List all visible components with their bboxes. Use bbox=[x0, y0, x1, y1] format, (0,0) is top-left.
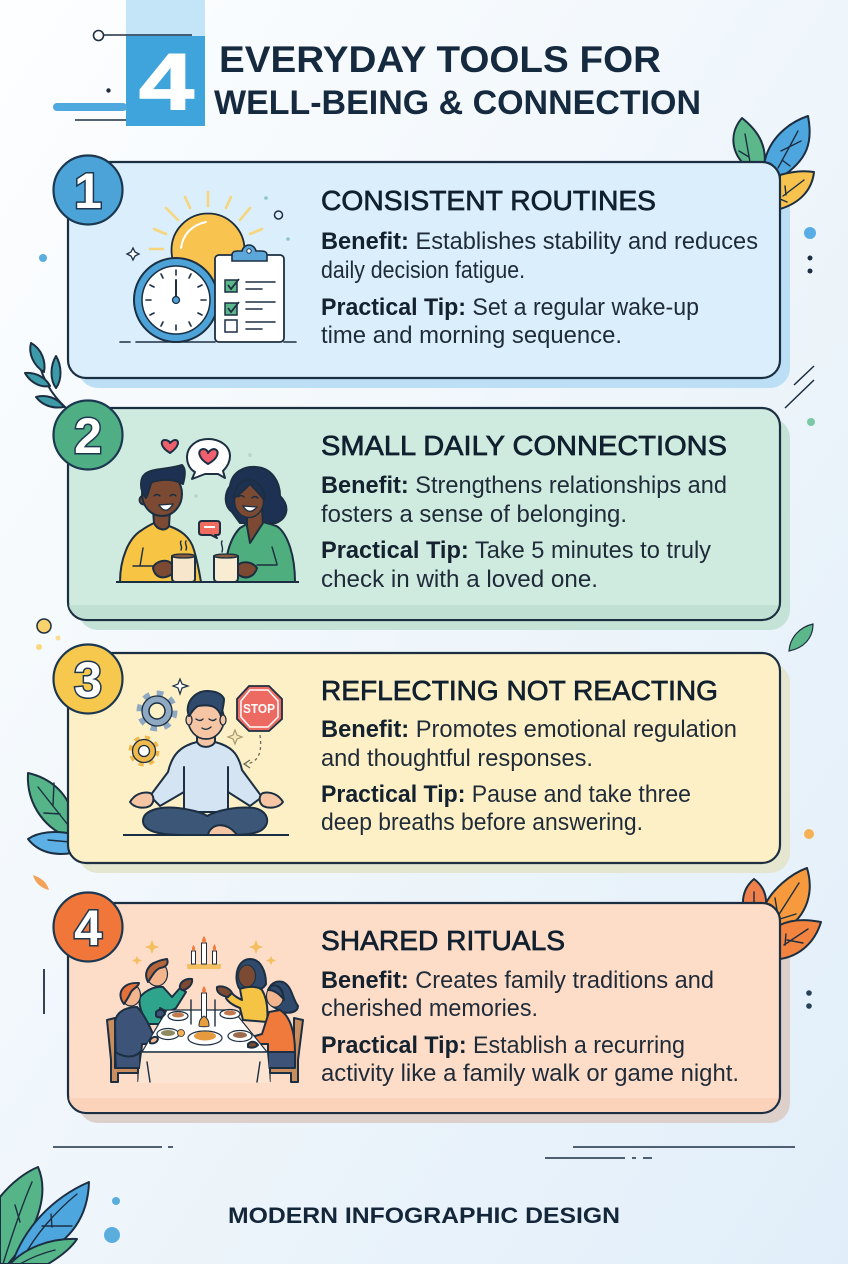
text: reflecting not reacting: deep breaths before answering. bbox=[321, 809, 643, 836]
navy man bbox=[115, 983, 158, 1068]
text: shared rituals: SHARED RITUALS bbox=[321, 925, 565, 956]
candles on shelf bbox=[187, 936, 221, 969]
badge 4: 4 bbox=[74, 900, 102, 956]
text: consistent routines bbox=[321, 185, 758, 349]
text: consistent routines: Benefit: Establishes stability and reduces bbox=[321, 228, 758, 255]
text: small daily connections: SMALL DAILY CONNECTIONS bbox=[321, 430, 727, 461]
woman bbox=[225, 467, 295, 582]
title: WELL-BEING & CONNECTION bbox=[214, 84, 701, 122]
yellow woman bbox=[217, 959, 267, 1022]
text: reflecting not reacting: REFLECTING NOT REACTING bbox=[321, 675, 718, 706]
text: consistent routines: time and morning sequence. bbox=[321, 322, 622, 349]
stop sign: STOP bbox=[243, 701, 275, 716]
text: consistent routines: Practical Tip: Set a regular wake-up bbox=[321, 294, 699, 321]
text: shared rituals: activity like a family walk or game night. bbox=[321, 1060, 739, 1087]
card 2 bbox=[54, 400, 780, 620]
badge 3: 3 bbox=[74, 652, 102, 708]
title: EVERYDAY TOOLS FOR bbox=[219, 39, 661, 80]
badge 2: 2 bbox=[74, 408, 102, 464]
text: small daily connections bbox=[321, 430, 727, 593]
text: consistent routines: daily decision fatigue. bbox=[321, 257, 525, 284]
sparkles bbox=[132, 940, 276, 965]
icon: family dinner table bbox=[107, 936, 303, 1083]
icon: meditating person bbox=[123, 679, 289, 835]
text: small daily connections: Benefit: Strengthens relationships and bbox=[321, 472, 727, 499]
header graphic: 4 bbox=[139, 37, 195, 126]
hands and cups bbox=[153, 541, 257, 582]
card shadows bbox=[78, 172, 790, 1123]
text: shared rituals: cherished memories. bbox=[321, 995, 538, 1022]
footer label: MODERN INFOGRAPHIC DESIGN bbox=[228, 1203, 620, 1228]
card 3 bbox=[54, 644, 780, 863]
text: reflecting not reacting: and thoughtful responses. bbox=[321, 745, 593, 772]
teal man bbox=[139, 959, 192, 1024]
text: consistent routines: CONSISTENT ROUTINES bbox=[321, 185, 656, 216]
icon: sun, clock and checklist bbox=[120, 192, 296, 342]
leaves: top right bbox=[733, 116, 814, 209]
speech bubbles and hearts bbox=[162, 439, 230, 538]
gears bbox=[132, 695, 173, 763]
leaves: left sprig bbox=[25, 343, 66, 408]
header graphic bbox=[53, 0, 205, 126]
leaves: bottom left bbox=[0, 1167, 89, 1264]
stop sign bbox=[237, 686, 282, 731]
people left bbox=[115, 959, 192, 1068]
decorative dots and lines bbox=[33, 227, 816, 1243]
badge 4 bbox=[54, 892, 122, 962]
chairs bbox=[107, 1018, 303, 1082]
man bbox=[120, 465, 201, 582]
leaves: bottom right of card 4 bbox=[743, 868, 821, 959]
icon: two friends with coffee bbox=[116, 439, 299, 582]
person bbox=[123, 691, 289, 835]
badge 1: 1 bbox=[74, 163, 102, 219]
card 1 bbox=[54, 156, 780, 378]
title bbox=[214, 39, 701, 122]
badge 3 bbox=[54, 644, 122, 714]
text: reflecting not reacting: Practical Tip: Pause and take three bbox=[321, 781, 691, 808]
text: small daily connections: check in with a loved one. bbox=[321, 566, 598, 593]
badge 2 bbox=[54, 400, 122, 470]
text: shared rituals: Benefit: Creates family traditions and bbox=[321, 967, 714, 994]
text: reflecting not reacting: Benefit: Promotes emotional regulation bbox=[321, 716, 737, 743]
text: shared rituals: Practical Tip: Establish a recurring bbox=[321, 1032, 685, 1059]
card 4 bbox=[54, 892, 780, 1113]
table bbox=[138, 986, 270, 1083]
people right bbox=[217, 959, 298, 1068]
text: shared rituals bbox=[321, 925, 739, 1087]
orange woman bbox=[248, 982, 298, 1068]
text: small daily connections: Practical Tip: Take 5 minutes to truly bbox=[321, 537, 712, 564]
badge 1 bbox=[54, 156, 122, 224]
text: small daily connections: fosters a sense of belonging. bbox=[321, 501, 627, 528]
text: reflecting not reacting bbox=[321, 675, 737, 836]
leaves: left of card 3 bbox=[28, 773, 72, 854]
